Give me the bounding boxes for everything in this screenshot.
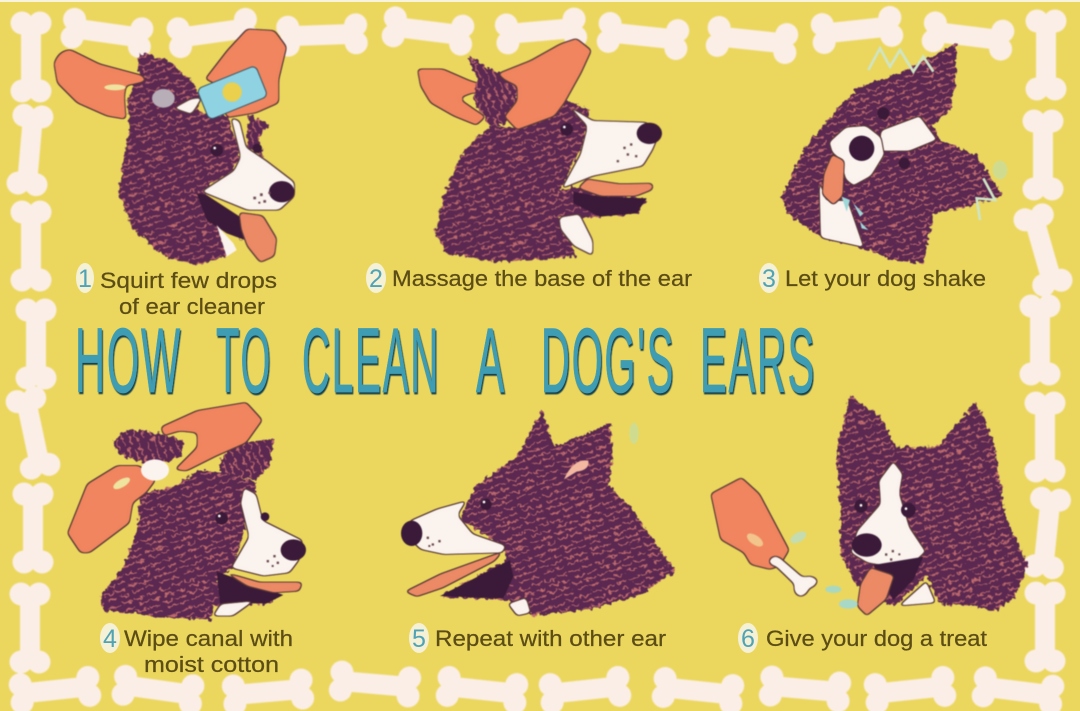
title: DOG'S [541,310,675,412]
caption: step 5: Repeat with other ear [435,626,666,651]
caption: step 5 [409,623,666,653]
title: A [476,310,506,412]
illustration: step 4 dog ear wipe with cotton [67,402,306,620]
caption: step 6: 6 [741,625,755,653]
title: HOW [75,310,182,412]
caption: step 3: 3 [762,265,776,293]
title [75,310,816,412]
title: TO [216,310,272,412]
caption: step 1: 1 [78,265,92,293]
caption: step 6 [738,623,987,653]
illustration: step 2 dog ear massage [417,38,662,262]
caption: step 2: Massage the base of the ear [392,266,692,291]
caption: step 4: moist cotton [144,652,279,677]
caption: step 3 [759,263,986,293]
caption: step 2: 2 [369,265,383,293]
caption: step 5: 5 [412,625,426,653]
caption: step 3: Let your dog shake [785,266,986,291]
caption: step 4: 4 [103,625,117,653]
caption: step 4: Wipe canal with [124,626,293,651]
illustration: step 3 dog shaking [782,43,1007,263]
caption: step 1: of ear cleaner [119,294,265,319]
caption: step 6: Give your dog a treat [766,626,987,651]
title: CLEAN [302,310,440,412]
illustration: step 6 dog with treat [710,395,1028,617]
caption: step 4 [100,623,293,677]
caption: step 1 [76,263,277,319]
caption: step 1: Squirt few drops [100,268,277,293]
illustration: step 1 dog with cleaner bottle [53,28,295,265]
illustration: step 5 dog profile [401,410,675,617]
text: EARS [700,310,816,412]
